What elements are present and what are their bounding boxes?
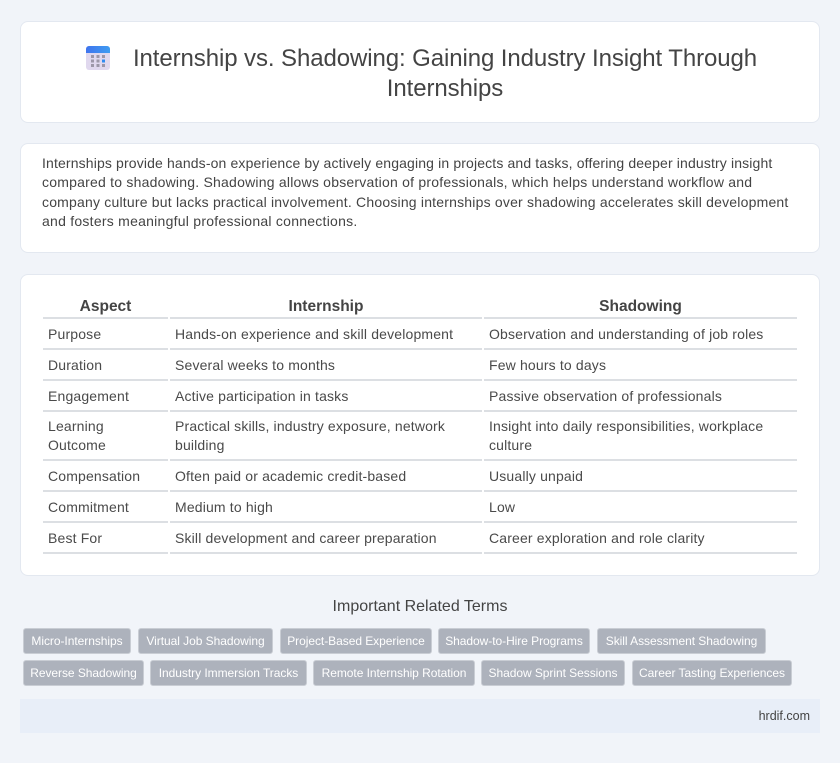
comparison table: Few hours to days bbox=[489, 357, 606, 373]
intro paragraph bbox=[42, 155, 788, 229]
comparison table: Low bbox=[489, 499, 515, 515]
comparison table: Shadowing bbox=[599, 298, 682, 315]
icon: calendar bbox=[86, 46, 110, 70]
comparison table: Often paid or academic credit-based bbox=[175, 468, 406, 484]
comparison table: Learning bbox=[48, 418, 104, 434]
comparison table: Several weeks to months bbox=[175, 357, 335, 373]
related terms tags: Remote Internship Rotation bbox=[322, 666, 466, 680]
intro text panel bbox=[20, 143, 820, 253]
footer bar bbox=[20, 699, 820, 733]
related terms tags: Virtual Job Shadowing bbox=[146, 634, 265, 648]
comparison table: Commitment bbox=[48, 499, 129, 515]
related terms tags: Shadow Sprint Sessions bbox=[488, 666, 617, 680]
related terms tags: Project-Based Experience bbox=[287, 634, 425, 648]
title bbox=[133, 45, 757, 102]
comparison table: Insight into daily responsibilities, workplace bbox=[489, 418, 763, 434]
comparison table: Usually unpaid bbox=[489, 468, 583, 484]
related terms tags: Micro-Internships bbox=[31, 634, 123, 648]
comparison table: Career exploration and role clarity bbox=[489, 530, 705, 546]
comparison table: Hands-on experience and skill development bbox=[175, 326, 453, 342]
comparison table: Outcome bbox=[48, 437, 106, 453]
comparison table: Practical skills, industry exposure, network bbox=[175, 418, 445, 434]
related terms tags: Skill Assessment Shadowing bbox=[606, 634, 757, 648]
comparison table: culture bbox=[489, 437, 532, 453]
comparison table: Medium to high bbox=[175, 499, 273, 515]
comparison table: Skill development and career preparation bbox=[175, 530, 437, 546]
related terms tags bbox=[23, 628, 792, 686]
comparison table: Observation and understanding of job roles bbox=[489, 326, 763, 342]
comparison table: building bbox=[175, 437, 225, 453]
intro paragraph: compared to shadowing. Shadowing allows observation of professionals, which helps understand workflow and bbox=[42, 174, 752, 190]
related terms tags: Reverse Shadowing bbox=[30, 666, 137, 680]
comparison table: Engagement bbox=[48, 388, 129, 404]
intro paragraph: Internships provide hands-on experience by actively engaging in projects and tasks, offering deeper industry insight bbox=[42, 155, 772, 171]
related terms tags: Shadow-to-Hire Programs bbox=[445, 634, 583, 648]
comparison table: Active participation in tasks bbox=[175, 388, 348, 404]
comparison table: Compensation bbox=[48, 468, 140, 484]
comparison table: Best For bbox=[48, 530, 102, 546]
intro paragraph: company culture but lacks practical involvement. Choosing internships over shadowing accelerates skill development bbox=[42, 194, 788, 210]
intro paragraph: and fosters meaningful professional connections. bbox=[42, 213, 358, 229]
comparison table: Passive observation of professionals bbox=[489, 388, 722, 404]
title: Internships bbox=[387, 75, 503, 102]
comparison table: Duration bbox=[48, 357, 102, 373]
comparison table: Internship bbox=[289, 298, 363, 315]
related terms tags: Career Tasting Experiences bbox=[639, 666, 785, 680]
comparison table panel bbox=[20, 274, 820, 576]
related terms heading: Important Related Terms bbox=[333, 598, 507, 615]
footer source: hrdif.com bbox=[759, 709, 810, 723]
header panel bbox=[20, 21, 820, 123]
title: Internship vs. Shadowing: Gaining Industry Insight Through bbox=[133, 45, 757, 72]
related terms tags: Industry Immersion Tracks bbox=[159, 666, 298, 680]
comparison table: Purpose bbox=[48, 326, 101, 342]
comparison table: Aspect bbox=[80, 298, 131, 315]
